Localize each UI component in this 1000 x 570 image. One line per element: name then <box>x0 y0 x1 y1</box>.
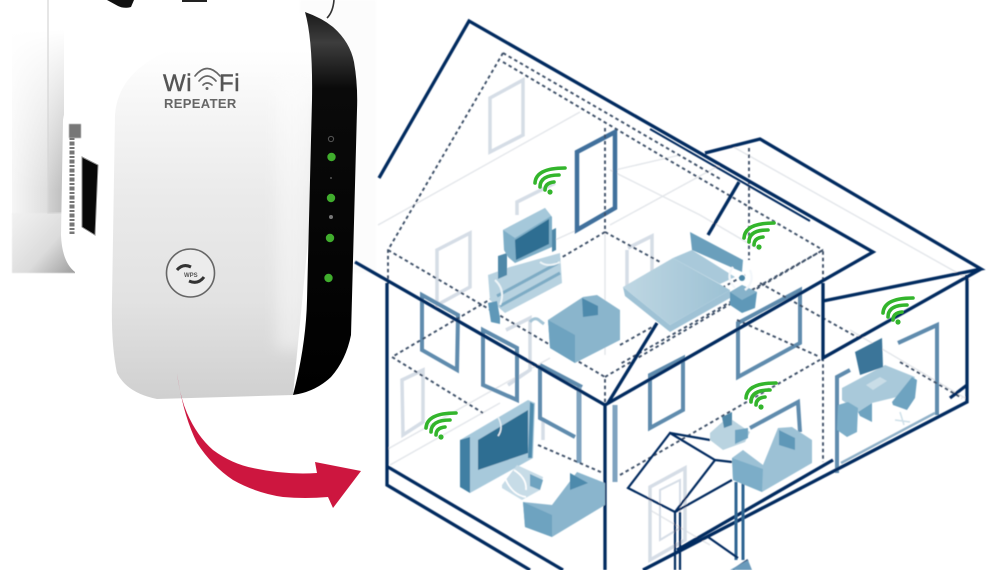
device face right highlight <box>276 80 308 350</box>
wifi repeater device <box>61 12 357 399</box>
WPS button <box>166 249 214 297</box>
brand logo: WiFi: Fi <box>219 70 240 97</box>
brand logo: WiFi <box>163 70 240 97</box>
rear speaker <box>488 301 500 324</box>
house cutaway diagram <box>355 21 981 570</box>
black side strip <box>293 12 357 395</box>
wifi signal icon: downstairs right <box>746 383 776 410</box>
status LEDs <box>324 136 336 282</box>
desk leg <box>858 403 872 422</box>
TV body <box>503 208 552 263</box>
side screen port <box>82 157 98 235</box>
brand logo: REPEATER: REPEATER <box>164 96 237 111</box>
coffee table with router <box>502 465 543 500</box>
TV stand shelves <box>497 263 560 306</box>
side label texture <box>70 138 74 234</box>
TV top <box>503 208 551 238</box>
small plant <box>530 319 544 324</box>
wifi signal icon: downstairs left <box>426 413 456 440</box>
keyboard <box>866 377 887 390</box>
wifi signal icon: annex <box>883 298 913 325</box>
wifi symbol in logo <box>195 68 220 90</box>
upstairs TV unit <box>488 208 562 324</box>
red curved arrow <box>177 373 361 508</box>
router white signal arcs <box>495 262 560 305</box>
TV stand base <box>488 253 562 313</box>
downstairs TV <box>460 400 535 493</box>
monitor <box>855 338 883 375</box>
house outline <box>355 21 981 570</box>
plug and cord fragments <box>107 0 334 18</box>
device front face <box>112 34 312 399</box>
annex desk, computer and chair <box>837 338 917 437</box>
TV stand posts <box>498 228 556 279</box>
downstairs sofa <box>523 472 605 537</box>
TV screen <box>515 219 549 260</box>
blue windows and doors <box>422 132 937 482</box>
computer tower <box>837 402 858 437</box>
faint floor plan lines <box>378 112 970 545</box>
wifi signal icon: bedroom <box>744 223 774 250</box>
side table with router <box>710 412 750 450</box>
right lounge sofa <box>732 427 812 492</box>
nightstand with router <box>729 267 757 313</box>
porch roof and posts <box>628 433 748 570</box>
upstairs armchair <box>548 295 620 363</box>
front porch step <box>730 560 752 570</box>
wifi signal icon: upstairs living <box>535 168 565 195</box>
desk top <box>842 365 915 412</box>
WPS button: WPS <box>184 273 198 279</box>
bed <box>623 232 743 332</box>
wall plate <box>12 0 376 273</box>
side label block <box>69 124 81 138</box>
device body <box>61 12 318 399</box>
brand logo: WiFi: Wi <box>163 70 192 97</box>
chair <box>892 377 917 410</box>
dashed interior lines <box>388 53 962 475</box>
faint windows <box>402 80 685 560</box>
